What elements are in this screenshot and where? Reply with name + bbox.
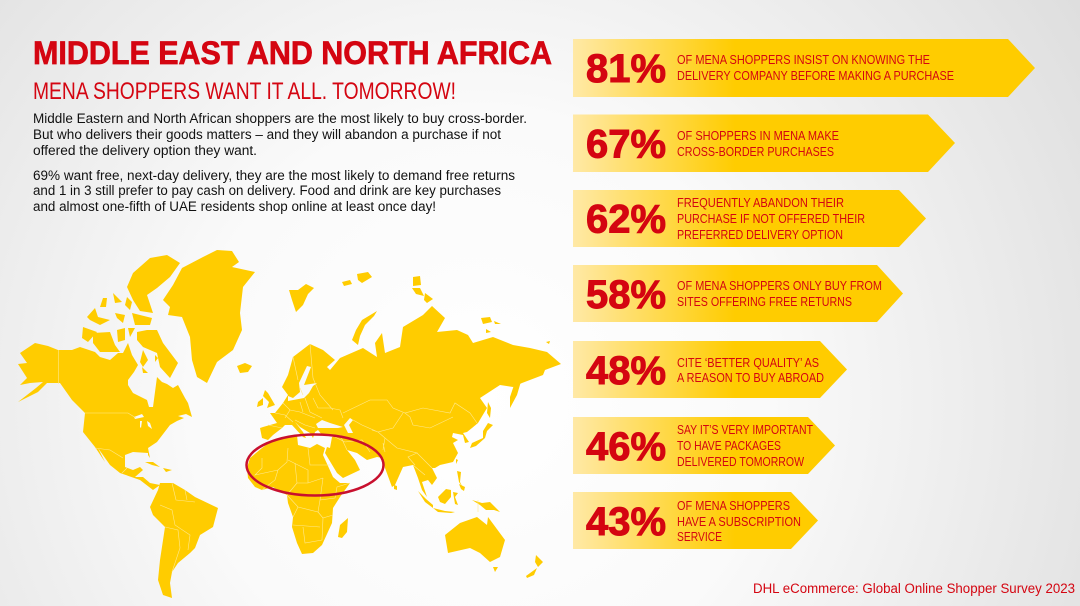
country borders — [58, 344, 478, 572]
stat arrow: 58%: SITES OFFERING FREE RETURNS — [677, 294, 852, 309]
stat arrow: 81%: OF MENA SHOPPERS INSIST ON KNOWING THE — [677, 52, 930, 67]
Eurasia — [260, 306, 561, 497]
stat arrow: 62%: 62% — [586, 198, 666, 242]
stat arrow: 48%: CITE ‘BETTER QUALITY’ AS — [677, 355, 819, 370]
Caribbean islands — [145, 462, 172, 472]
stat arrow: 46%: TO HAVE PACKAGES — [677, 438, 781, 453]
intro text block: 69% want free, next-day delivery, they are the most likely to demand free returns — [33, 168, 515, 183]
Indonesia and New Guinea — [418, 489, 500, 513]
stat arrow: 58% — [573, 265, 903, 322]
stat arrow: 48%: 48% — [586, 349, 666, 393]
stat arrow: 43% — [573, 492, 818, 549]
Japan — [470, 423, 493, 448]
stat arrow: 46%: 46% — [586, 425, 666, 469]
Novaya Zemlya — [352, 311, 377, 345]
intro text block: and almost one-fifth of UAE residents shop online at least once day! — [33, 199, 436, 214]
Ellesmere and arctic islands — [127, 255, 180, 313]
Svalbard — [289, 284, 314, 312]
stat arrow: 81%: DELIVERY COMPANY BEFORE MAKING A PURCHASE — [677, 68, 954, 83]
stat arrow: 62%: FREQUENTLY ABANDON THEIR — [677, 195, 844, 210]
Madagascar — [338, 518, 348, 538]
intro text block: Middle Eastern and North African shoppers are the most likely to buy cross-border. — [33, 111, 527, 126]
stat arrow: 43%: OF MENA SHOPPERS — [677, 498, 790, 513]
Tasmania — [493, 567, 498, 572]
stat arrow: 58%: OF MENA SHOPPERS ONLY BUY FROM — [677, 278, 882, 293]
Australia — [445, 517, 505, 562]
Sri Lanka — [394, 485, 397, 490]
intro text block: and 1 in 3 still prefer to pay cash on delivery. Food and drink are key purchases — [33, 183, 501, 198]
source footer: DHL eCommerce: Global Online Shopper Survey 2023 — [753, 581, 1075, 596]
Africa — [247, 435, 350, 554]
North America — [18, 343, 192, 490]
stat arrow: 81% — [573, 39, 1035, 97]
red ellipse highlighting MENA — [246, 434, 384, 496]
Severnaya Zemlya — [412, 276, 433, 303]
intro text block — [33, 111, 527, 214]
world map — [18, 250, 561, 598]
stat arrow: 46% — [573, 417, 835, 474]
stat arrow: 67%: 67% — [586, 122, 666, 166]
stat arrow: 62%: PURCHASE IF NOT OFFERED THEIR — [677, 211, 865, 226]
stat arrow: 62% — [573, 190, 926, 247]
UK and Ireland — [257, 390, 275, 408]
intro text block: offered the delivery option they want. — [33, 143, 257, 158]
Sakhalin and Kamchatka — [487, 378, 522, 418]
stat arrow: 43%: SERVICE — [677, 529, 722, 544]
Franz Josef Land — [342, 272, 372, 286]
stat arrow: 48%: A REASON TO BUY ABROAD — [677, 370, 824, 385]
stat arrow: 43%: 43% — [586, 500, 666, 544]
stat arrow: 46%: DELIVERED TOMORROW — [677, 454, 805, 469]
stat arrow: 58%: 58% — [586, 273, 666, 317]
stat arrow: 67% — [573, 114, 955, 172]
stat arrow: 81%: 81% — [586, 47, 666, 91]
Taiwan and Philippines — [456, 459, 465, 491]
inland seas and lakes — [134, 366, 353, 433]
stat arrow: 48% — [573, 341, 847, 398]
stat arrow: 43%: HAVE A SUBSCRIPTION — [677, 514, 801, 529]
intro text block: But who delivers their goods matters – and they will abandon a purchase if not — [33, 127, 501, 142]
New Siberian and Wrangel islands — [481, 317, 550, 344]
stat arrow: 67%: CROSS-BORDER PURCHASES — [677, 144, 834, 159]
subtitle: MENA SHOPPERS WANT IT ALL. TOMORROW! — [33, 78, 456, 105]
New Zealand — [526, 555, 543, 578]
title: MIDDLE EAST AND NORTH AFRICA — [33, 35, 552, 71]
stat arrow: 46%: SAY IT’S VERY IMPORTANT — [677, 422, 813, 437]
South America — [150, 483, 218, 598]
Greenland — [163, 250, 255, 383]
Iceland — [237, 363, 252, 373]
stat arrow: 67%: OF SHOPPERS IN MENA MAKE — [677, 128, 839, 143]
stat arrow: 62%: PREFERRED DELIVERY OPTION — [677, 227, 843, 242]
